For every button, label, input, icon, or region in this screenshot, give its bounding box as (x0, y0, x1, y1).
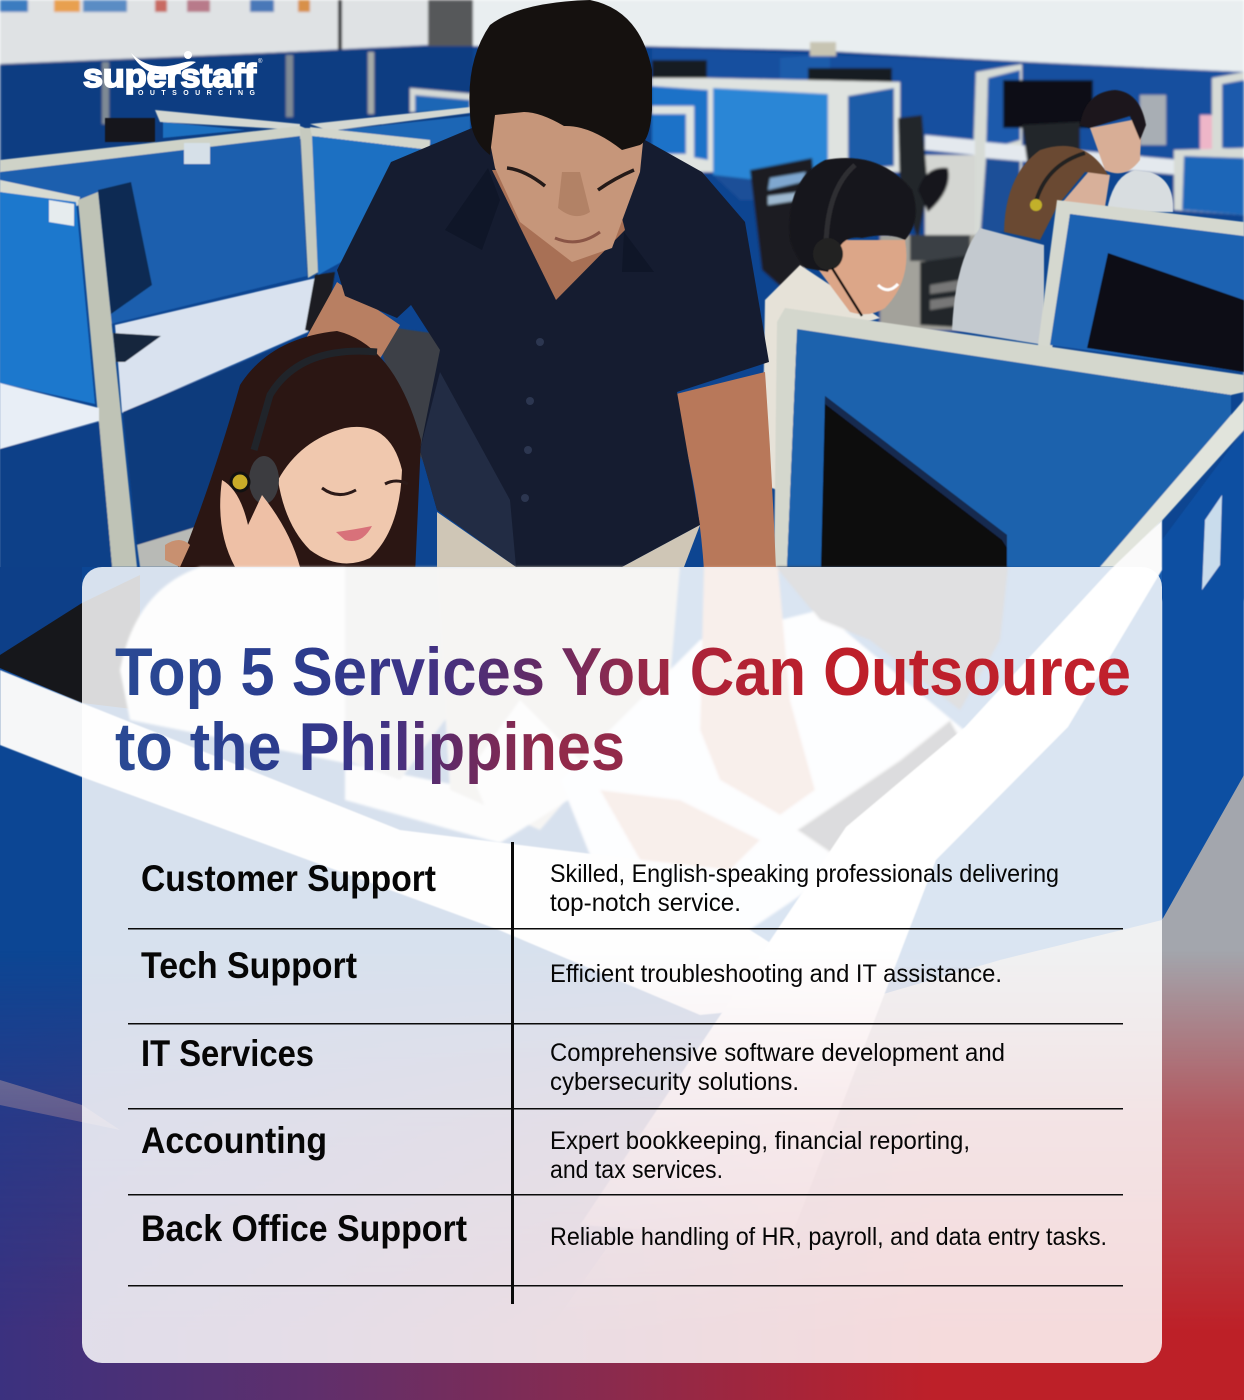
man's hair (469, 0, 652, 155)
row: customer support: Skilled, English-speaking professionals delivering (550, 860, 1059, 888)
floor at lower right (500, 775, 1244, 1400)
dark area behind chair (0, 567, 82, 660)
row: accounting: and tax services. (550, 1156, 723, 1184)
left cubicles (0, 107, 470, 600)
logo wordmark: superstaff (83, 57, 257, 94)
man's neck (492, 170, 625, 300)
row: customer support (141, 858, 1059, 917)
row: customer support: top-notch service. (550, 889, 741, 917)
man's forearm and hand (700, 567, 815, 815)
man's face (484, 95, 645, 262)
background agents (762, 90, 1173, 490)
row: customer support: Customer Support (141, 858, 436, 899)
logo tagline: OUTSOURCING (138, 90, 256, 97)
row: tech support: Tech Support (141, 945, 357, 986)
centre cubicle (652, 78, 900, 172)
right big cubicle and monitor (774, 200, 1244, 920)
headset band and earcup (254, 351, 377, 450)
back wall and cubicle rows (0, 0, 1244, 600)
row: IT services: Comprehensive software development and (550, 1039, 1005, 1067)
row: IT services: cybersecurity solutions. (550, 1068, 799, 1096)
agent: woman in grey cardigan (952, 146, 1110, 345)
shirt buttons (521, 338, 544, 502)
desk surface (560, 610, 1000, 950)
row: back office support: Reliable handling of HR, payroll, and data entry tasks. (550, 1223, 1107, 1251)
title (115, 634, 1131, 785)
registered mark: ® (258, 58, 263, 65)
row: accounting (141, 1120, 970, 1184)
man's navy polo shirt (337, 128, 769, 567)
table row rules (128, 928, 1123, 1286)
black chair (0, 575, 140, 710)
row: accounting: Expert bookkeeping, financial reporting, (550, 1127, 970, 1155)
white blouse (120, 567, 530, 843)
woman's hand (220, 480, 300, 567)
woman's facial features (322, 481, 408, 495)
white diagonal beam left (0, 670, 860, 1015)
man's arms (305, 282, 400, 362)
agent: man in background smiling (1080, 90, 1173, 212)
row: tech support: Efficient troubleshooting and IT assistance. (550, 960, 1002, 988)
white diagonal beam right (580, 520, 1162, 1240)
row: tech support (141, 945, 1002, 988)
services table (128, 842, 1123, 1304)
row: back office support: Back Office Support (141, 1208, 467, 1249)
woman with headset (165, 331, 421, 575)
table vertical divider (511, 842, 514, 1304)
khaki trousers (437, 512, 516, 567)
translucent content panel (82, 567, 1162, 1363)
row: IT services (141, 1033, 1005, 1096)
man's collar (445, 168, 500, 250)
logo swoosh (131, 53, 196, 74)
main man standing (305, 0, 776, 570)
chairs (898, 115, 928, 240)
trousers and dark gaps (345, 567, 460, 780)
far right cubicle row (970, 64, 1022, 252)
dark monitor reflections (776, 567, 1008, 710)
lower blue cubicle wall (0, 567, 1162, 1400)
bottom gradient overlay (0, 966, 1244, 1400)
row: back office support (141, 1208, 1107, 1251)
logo: Superstaff Outsourcing (83, 51, 263, 97)
agent: man with headset (762, 158, 916, 490)
lower scene beneath panel (0, 520, 1244, 1400)
title: Top 5 Services You Can Outsource (115, 634, 1131, 710)
row: accounting: Accounting (141, 1120, 327, 1161)
title: to the Philippines (115, 709, 625, 785)
row: IT services: IT Services (141, 1033, 314, 1074)
